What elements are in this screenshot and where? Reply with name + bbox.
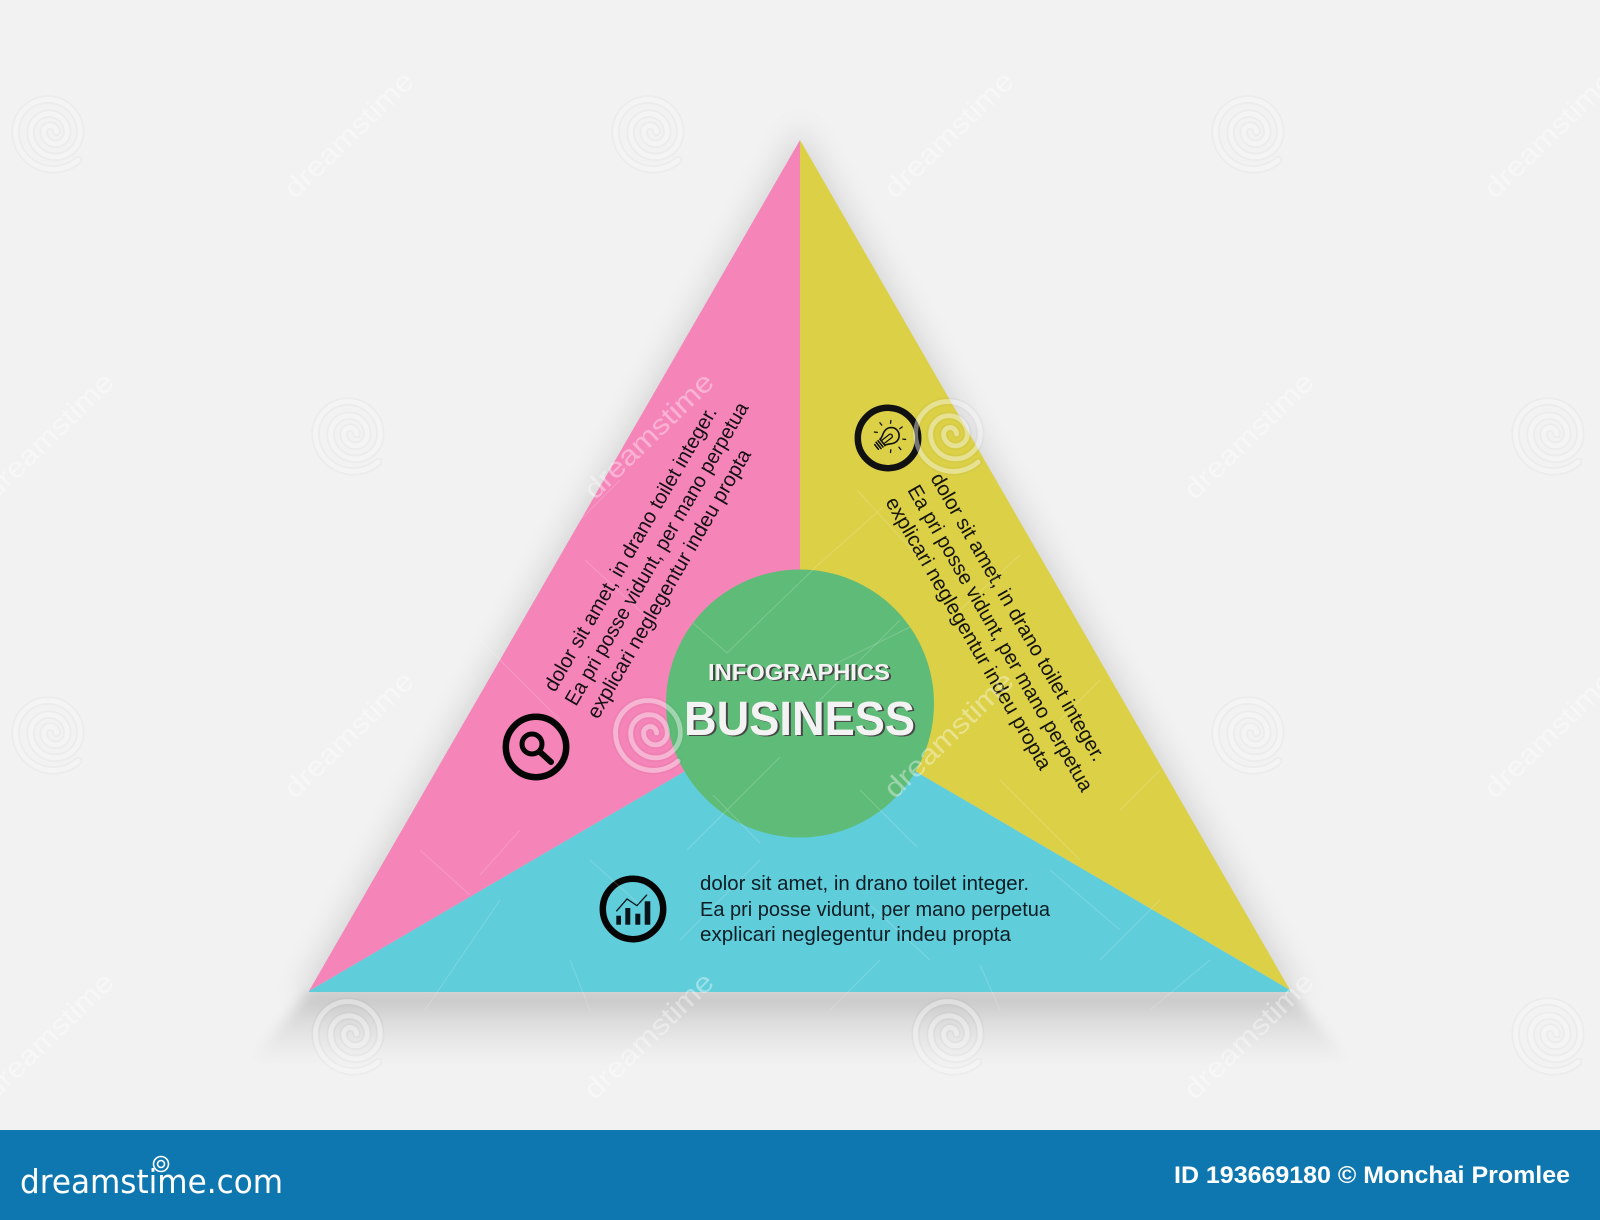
segment: pink <box>309 140 800 991</box>
center heading <box>684 659 915 746</box>
segment: cyan <box>309 704 1290 992</box>
pyramid diagram <box>309 140 1290 992</box>
icon: light bulb <box>858 408 918 468</box>
center circle <box>666 570 934 838</box>
footer credit: ID 193669180 © Monchai Promlee <box>1174 1162 1570 1189</box>
triangle shadow <box>250 128 1350 1062</box>
icon: footer swirl <box>154 1156 168 1172</box>
text block: yellow: explicari neglegentur indeu propta <box>881 493 1056 774</box>
heading: infographics: INFOGRAPHICS <box>708 659 890 685</box>
segment: yellow <box>800 140 1290 990</box>
heading: business: BUSINESS <box>684 693 915 746</box>
icon: bar chart <box>603 879 663 939</box>
text block: pink: dolor sit amet, in drano toilet integer. <box>539 403 722 696</box>
text block: cyan: dolor sit amet, in drano toilet integer. <box>700 872 1029 895</box>
text block: cyan: explicari neglegentur indeu propta <box>700 923 1012 946</box>
text block: cyan: Ea pri posse vidunt, per mano perpetua <box>700 898 1051 921</box>
footer bar <box>0 1130 1600 1220</box>
text block: pink: Ea pri posse vidunt, per mano perpetua <box>560 398 754 710</box>
text block: pink: explicari neglegentur indeu propta <box>582 445 756 722</box>
icon: magnifier <box>506 717 566 777</box>
text block: cyan <box>700 872 1051 946</box>
text block: yellow: dolor sit amet, in drano toilet integer. <box>926 469 1110 765</box>
footer logo: dreamstime.com: dreamstime.com <box>20 1162 283 1201</box>
text block: yellow: Ea pri posse vidunt, per mano perpetua <box>903 481 1098 796</box>
